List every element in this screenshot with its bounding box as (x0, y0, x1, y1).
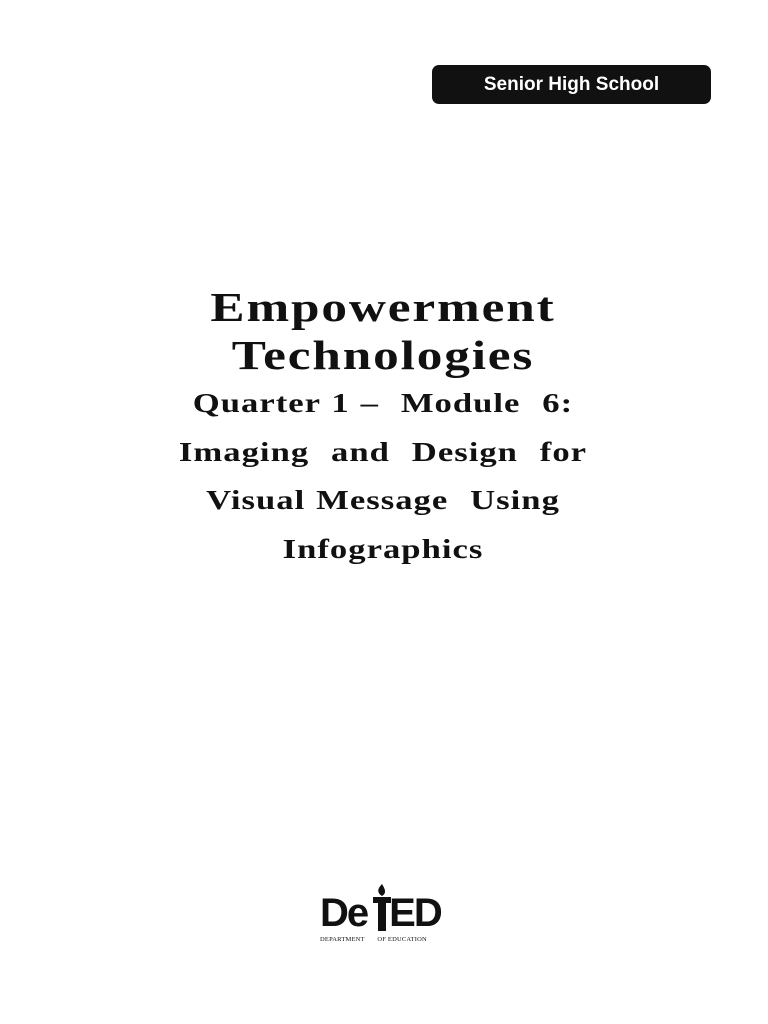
subtitle: Quarter 1 – Module 6: (193, 387, 573, 418)
banner: Senior High School (432, 65, 711, 104)
logo caption: DEPARTMENT OF EDUCATION (320, 936, 427, 943)
logo: DepED (320, 884, 442, 943)
subtitle: Visual Message Using (206, 484, 560, 515)
title: Technologies (232, 332, 534, 378)
subtitle: Infographics (283, 532, 483, 564)
subtitle (179, 387, 587, 564)
logo text: De ED (320, 891, 441, 935)
banner: Senior High School: Senior High School (484, 74, 659, 95)
subtitle: Imaging and Design for (179, 436, 587, 466)
title: Empowerment (210, 284, 556, 330)
title (210, 284, 556, 378)
icon: torch (373, 884, 391, 931)
